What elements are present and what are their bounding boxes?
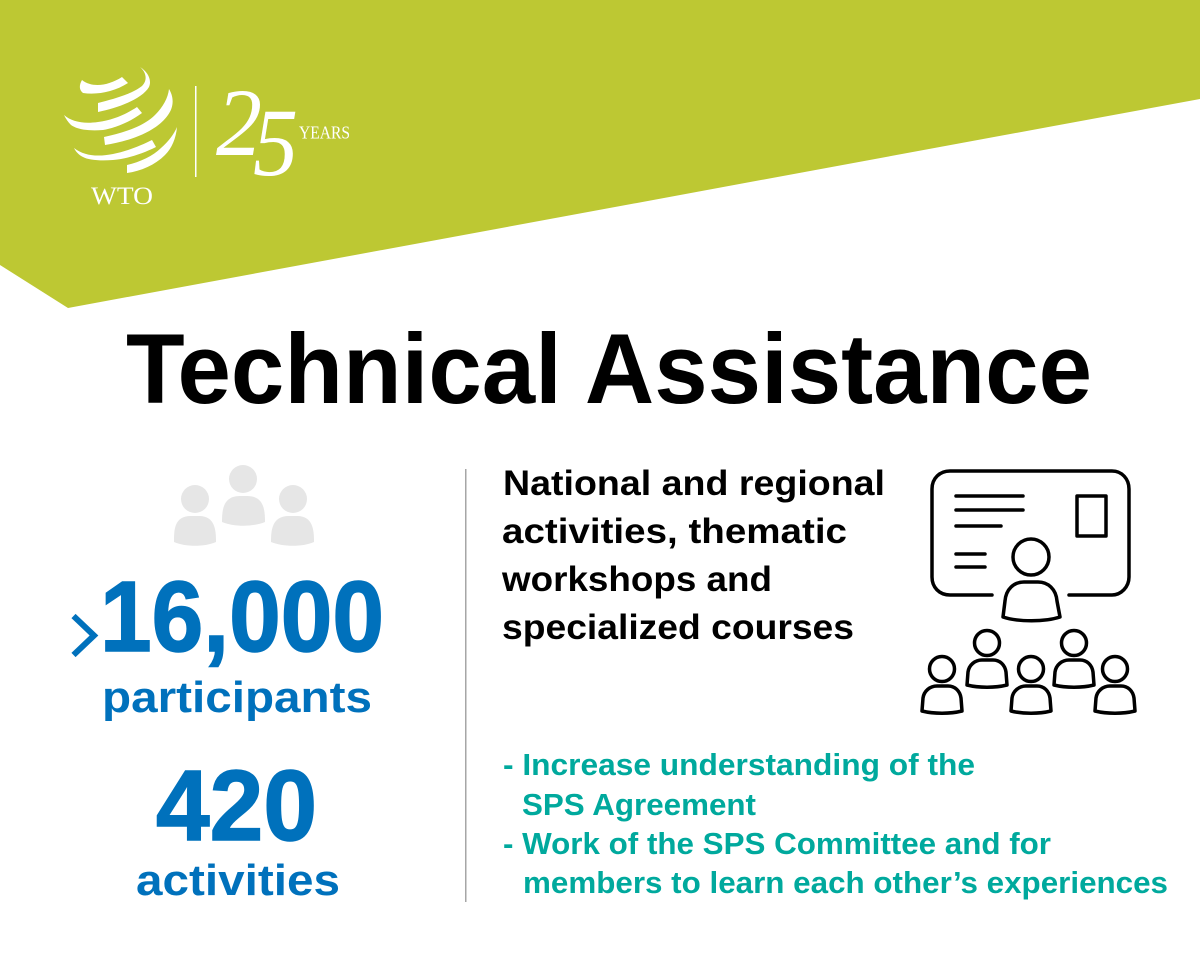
description text: National and regional — [503, 464, 885, 503]
icon: three people — [174, 465, 314, 546]
description text: workshops and — [501, 560, 772, 599]
25 numeral: 2 — [216, 69, 262, 176]
objectives list: - Increase understanding of the — [503, 747, 975, 782]
25 numeral — [216, 69, 298, 196]
chevron — [74, 616, 94, 655]
icon: presenter and audience — [922, 471, 1135, 713]
audience member — [1054, 630, 1094, 687]
description text: activities, thematic — [502, 512, 847, 551]
WTO wordmark: WTO — [91, 183, 153, 210]
presenter — [1003, 539, 1060, 621]
audience member — [922, 656, 962, 713]
activities label: activities — [136, 856, 340, 905]
audience member — [1011, 656, 1051, 713]
objectives list — [503, 747, 1168, 900]
participants number: 16,000 — [100, 561, 384, 673]
participants label: participants — [102, 673, 372, 722]
activities number: 420 — [156, 750, 317, 862]
audience member — [1095, 656, 1135, 713]
board text lines — [956, 496, 1023, 567]
divider — [195, 86, 196, 177]
objectives list: - Work of the SPS Committee and for — [503, 826, 1051, 861]
25 numeral: 5 — [253, 89, 298, 196]
title: Technical Assistance — [126, 313, 1092, 424]
icon: WTO globe — [64, 67, 177, 173]
panel: statistics — [74, 465, 384, 905]
green header banner — [0, 0, 1200, 308]
YEARS label: YEARS — [299, 122, 350, 142]
objectives list: members to learn each other’s experiences — [523, 865, 1168, 900]
board picture — [1077, 496, 1106, 536]
description text — [501, 464, 885, 647]
WTO 25 years logo — [64, 67, 350, 210]
description text: specialized courses — [502, 608, 854, 647]
presentation board — [932, 471, 1129, 595]
audience member — [967, 630, 1007, 687]
objectives list: SPS Agreement — [522, 787, 756, 822]
